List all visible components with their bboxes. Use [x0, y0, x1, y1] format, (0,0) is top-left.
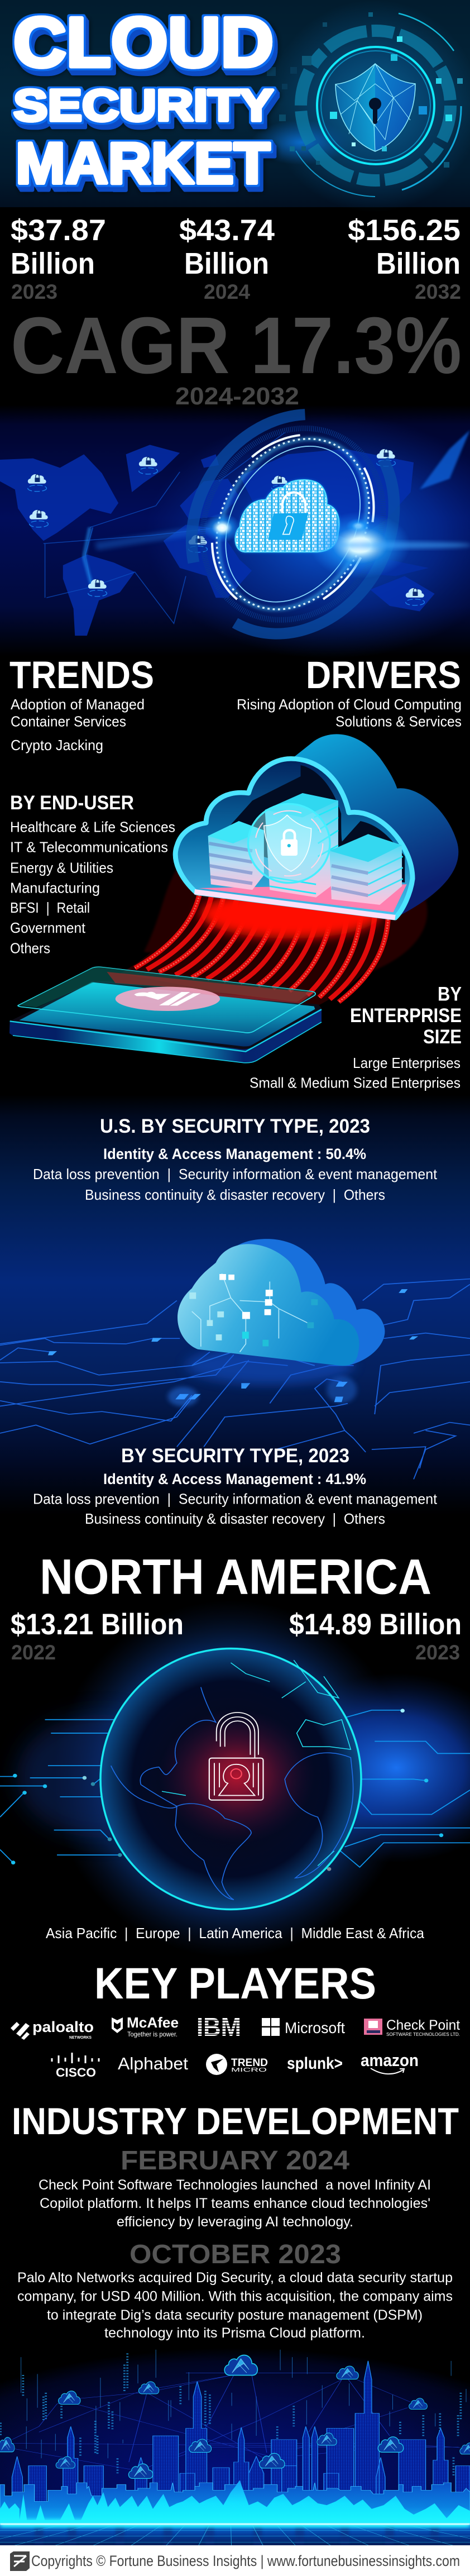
february 2024 item: efficiency by leveraging AI technology. — [117, 2214, 353, 2230]
panel: drivers — [237, 653, 462, 729]
logo: cisco: CISCO — [56, 2065, 96, 2079]
night dome — [0, 2348, 470, 2526]
panel: key players — [11, 1958, 460, 2079]
value 2032: 2032 — [415, 280, 461, 303]
binary columns — [1, 2353, 461, 2481]
glass top band — [19, 967, 312, 1007]
panel: by enterprise size: Large Enterprises — [353, 1055, 461, 1071]
logo: mcafee — [112, 2014, 179, 2038]
value 2023: 2023 — [11, 280, 57, 303]
network lines — [12, 2373, 468, 2469]
city floor — [0, 2524, 470, 2547]
logo: palo alto: paloalto — [32, 2019, 94, 2035]
floor reflections — [39, 2524, 435, 2546]
logo: splunk: splunk> — [287, 2054, 343, 2073]
title: MARKET — [16, 131, 270, 196]
flare left — [203, 513, 241, 542]
october 2023 item — [17, 2240, 453, 2341]
logo: palo alto: NETWORKS — [69, 2036, 92, 2040]
title: SECURITY — [13, 80, 274, 130]
october 2023 item: company, for USD 400 Million. With this acquisition, the company aims — [17, 2289, 453, 2305]
tablet bezel — [11, 981, 322, 1050]
october 2023 item: Palo Alto Networks acquired Dig Security, a cloud data security startup — [17, 2270, 453, 2286]
value 2023: 2023 — [415, 1641, 460, 1664]
february 2024 item: Copilot platform. It helps IT teams enhance cloud technologies' — [40, 2196, 430, 2211]
floating clouds — [0, 2355, 470, 2478]
value 2022 — [11, 1608, 184, 1664]
cloud circuit — [192, 1273, 311, 1352]
illustration: neon city — [0, 2348, 470, 2547]
network light beams — [44, 430, 470, 623]
panel: by end-user: Healthcare & Life Sciences — [10, 819, 175, 836]
panel: by end-user: Government — [10, 919, 86, 936]
panel: by end-user: BFSI | Retail — [10, 899, 90, 916]
panel: by end-user: BY END-USER — [10, 792, 134, 814]
logo: mcafee: McAfee — [127, 2014, 179, 2031]
icon: security ring and shield — [296, 13, 461, 197]
shield lens — [248, 804, 330, 883]
title: CLOUD — [13, 3, 274, 82]
value 2022: 2022 — [11, 1641, 56, 1664]
october 2023 item: OCTOBER 2023 — [130, 2240, 341, 2269]
other regions: Asia Pacific | Europe | Latin America | Middle East & Africa — [46, 1925, 425, 1941]
red reflection — [107, 972, 314, 1004]
CAGR figure: 2024-2032 — [175, 383, 299, 410]
horizon glow — [0, 2519, 470, 2527]
server stack left — [208, 821, 264, 890]
icon: tablet — [9, 967, 322, 1063]
panel: trends: Container Services — [11, 713, 126, 729]
value 2032: $156.25 — [348, 214, 461, 247]
cloud interior — [175, 759, 413, 918]
logo: cisco — [52, 2053, 99, 2079]
value 2024: $43.74 — [179, 214, 275, 247]
US security type text: Identity & Access Management : 50.4% — [103, 1146, 366, 1162]
value 2032 — [348, 214, 461, 303]
february 2024 item: Check Point Software Technologies launched a novel Infinity AI — [39, 2177, 431, 2193]
panel: by end-user — [10, 792, 175, 956]
background towers — [12, 2361, 470, 2524]
cloud nodes — [189, 1274, 318, 1346]
logo: check point: Check Point — [386, 2017, 460, 2033]
digital rings — [154, 381, 432, 667]
circuit lines — [0, 1710, 470, 1868]
logo: microsoft: Microsoft — [285, 2019, 345, 2036]
logo: trend micro: TREND — [231, 2057, 268, 2069]
logo: mcafee: Together is power. — [127, 2030, 178, 2038]
global security type text: Business continuity & disaster recovery | Others — [85, 1510, 385, 1527]
US security type text — [33, 1115, 438, 1203]
US security type text: U.S. BY SECURITY TYPE, 2023 — [100, 1115, 370, 1137]
rising data lines — [21, 2350, 466, 2458]
panel: by enterprise size — [250, 983, 462, 1091]
cloud depth — [196, 734, 458, 918]
heading: key players: KEY PLAYERS — [94, 1958, 376, 2008]
pink floor — [198, 884, 407, 912]
cloud back — [210, 1239, 385, 1366]
logo: ibm: IBM — [196, 2012, 241, 2041]
panel: north america — [0, 1548, 470, 1958]
logo: trend micro — [206, 2054, 268, 2075]
panel: by enterprise size: Small & Medium Sized Enterprises — [250, 1075, 461, 1091]
floor edge — [194, 892, 395, 918]
logo: trend micro: MICRO — [231, 2067, 267, 2073]
cloud padlock icon — [235, 480, 339, 552]
panel: by end-user: IT & Telecommunications — [10, 839, 168, 856]
logo: check point: SOFTWARE TECHNOLOGIES LTD. — [386, 2032, 460, 2037]
logo: alphabet: Alphabet — [118, 2054, 188, 2073]
market size figures — [11, 214, 461, 303]
logo: microsoft — [262, 2018, 345, 2036]
panel: trends — [9, 653, 154, 753]
icon: circuit cloud — [178, 1239, 385, 1366]
panel: security type background — [0, 1095, 470, 1542]
value 2023 — [11, 214, 106, 303]
logo: check point — [364, 2017, 460, 2037]
floor grid — [0, 2524, 470, 2547]
icon: isometric security cloud — [175, 734, 458, 918]
october 2023 item: to integrate Dig’s data security posture management (DSPM) — [47, 2307, 423, 2323]
panel: trends: Adoption of Managed — [11, 696, 145, 713]
mid skyline — [0, 2481, 470, 2524]
value 2024: 2024 — [204, 280, 250, 303]
title — [13, 3, 274, 196]
US security type text: Data loss prevention | Security information & event management — [33, 1166, 438, 1182]
server stack centre — [265, 793, 338, 898]
left blue light — [251, 120, 352, 165]
red glow — [159, 1709, 315, 1843]
glass sheet — [18, 967, 315, 1033]
footer bar — [0, 2545, 470, 2576]
circuit glow nodes — [48, 1289, 418, 1406]
heading: north america: NORTH AMERICA — [40, 1548, 431, 1604]
right blue light — [274, 1673, 470, 1863]
panel: header — [0, 0, 470, 212]
global security type text: Data loss prevention | Security information & event management — [33, 1490, 438, 1507]
decorative data squares — [267, 12, 463, 168]
panel: by end-user: Energy & Utilities — [10, 859, 113, 876]
icon: circuit padlock — [209, 1712, 263, 1800]
globe halo — [52, 1600, 410, 1958]
value 2023: $37.87 — [11, 214, 106, 247]
panel: drivers: Solutions & Services — [335, 713, 462, 729]
horizon line — [0, 2523, 470, 2525]
tablet screen — [19, 982, 315, 1047]
flare right — [310, 512, 410, 579]
global security type text: BY SECURITY TYPE, 2023 — [121, 1445, 349, 1467]
globe — [100, 1649, 361, 1909]
october 2023 item: technology into its Prisma Cloud platform. — [104, 2325, 365, 2341]
panel: trends: TRENDS — [9, 653, 154, 697]
panel: by enterprise size: BY — [438, 983, 462, 1005]
value 2032: Billion — [376, 247, 461, 280]
value 2024: Billion — [184, 247, 269, 280]
panel: by enterprise size: SIZE — [423, 1026, 462, 1048]
server stack right — [329, 834, 403, 905]
map lock markers — [28, 449, 424, 605]
value 2023 — [289, 1608, 462, 1664]
horizontal light streak — [332, 542, 470, 548]
shield glow — [268, 0, 470, 212]
profile glyph — [134, 992, 201, 1006]
february 2024 item — [39, 2146, 431, 2230]
continents — [0, 445, 435, 636]
panel: industry development — [12, 2100, 459, 2341]
circuit traces — [0, 1279, 470, 1479]
icon: fortune logo — [10, 2551, 30, 2571]
value 2023: Billion — [11, 247, 95, 280]
value 2022: $13.21 Billion — [11, 1608, 184, 1641]
red data stream — [120, 849, 445, 1009]
value 2024 — [179, 214, 275, 303]
tablet side — [9, 1009, 322, 1063]
tablet rim — [10, 1009, 322, 1052]
dark interior wall — [215, 765, 405, 882]
february 2024 item: FEBRUARY 2024 — [121, 2146, 349, 2176]
flare small — [346, 518, 371, 534]
left blue band — [17, 1715, 184, 1838]
panel: trends: Crypto Jacking — [11, 737, 103, 753]
logo: amazon: amazon — [361, 2050, 419, 2070]
near skyline — [0, 2481, 470, 2524]
US security type text: Business continuity & disaster recovery | Others — [85, 1186, 385, 1203]
global security type text — [33, 1445, 438, 1527]
panel: world map — [0, 381, 470, 667]
panel: by end-user: Manufacturing — [10, 879, 100, 896]
continents outline — [111, 1660, 353, 1900]
logo: palo alto — [11, 2019, 94, 2040]
cloud front — [178, 1244, 359, 1366]
circuit end nodes — [11, 1708, 443, 1871]
panel: by end-user: Others — [10, 939, 50, 956]
profile disc — [116, 987, 220, 1011]
map light — [145, 413, 470, 659]
global security type text: Identity & Access Management : 41.9% — [103, 1471, 366, 1487]
panel: drivers: Rising Adoption of Cloud Computing — [237, 696, 462, 713]
